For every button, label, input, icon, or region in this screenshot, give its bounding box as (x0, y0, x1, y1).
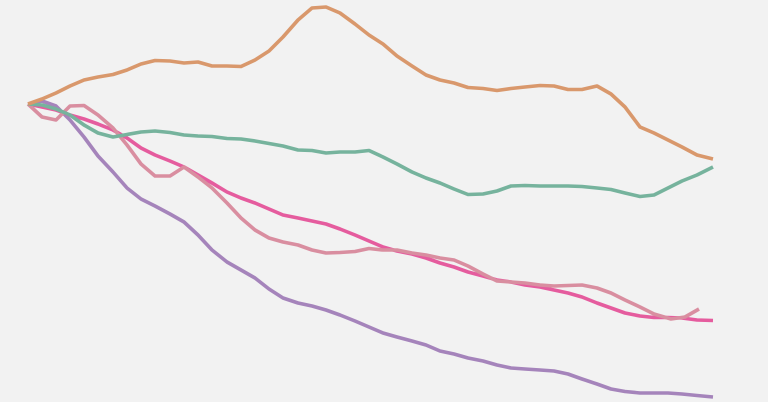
line: green series (28, 104, 713, 196)
line: magenta series (28, 104, 713, 320)
line: light pink series (28, 104, 699, 319)
line: orange series (28, 7, 713, 159)
line: purple series (28, 101, 713, 397)
